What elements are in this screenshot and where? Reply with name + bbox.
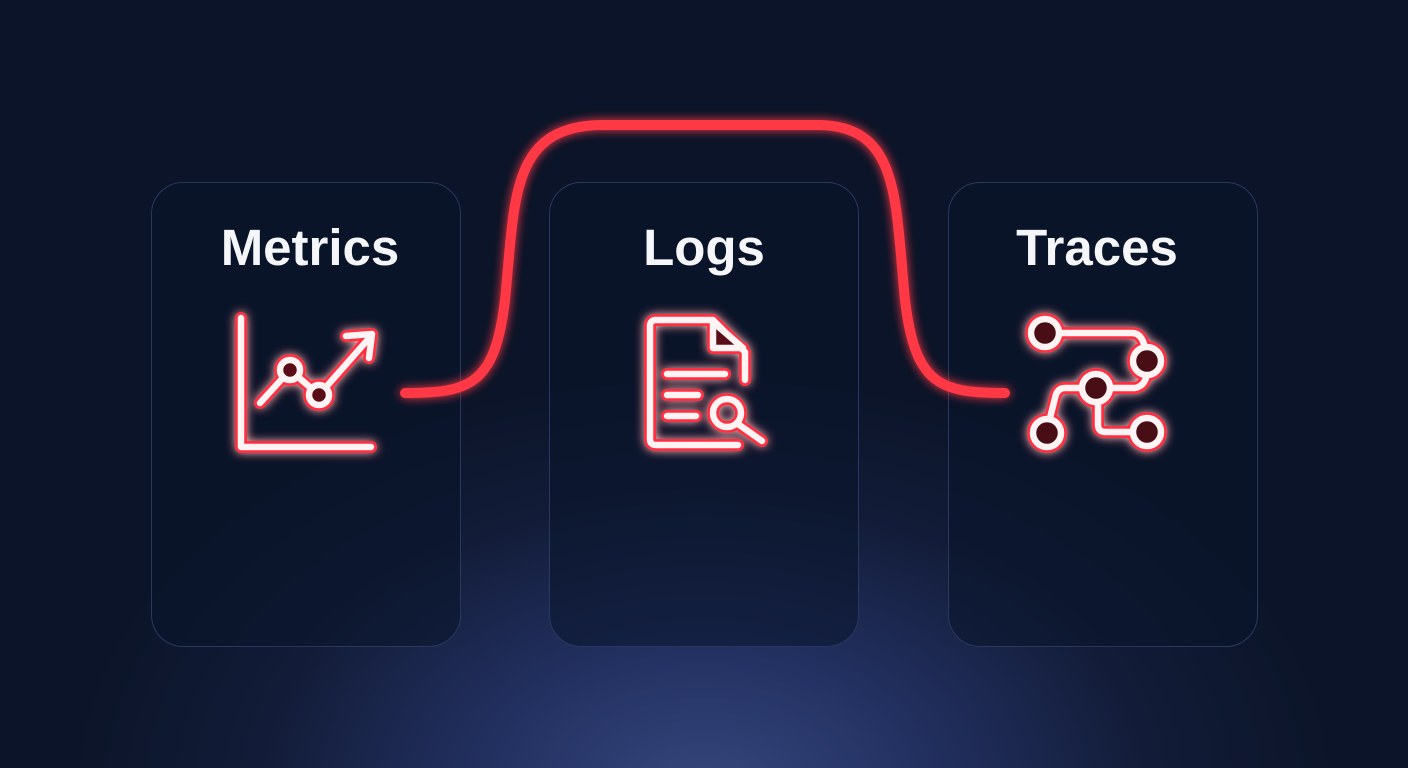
icon: logs document xyxy=(650,320,762,445)
connector curve xyxy=(405,125,1005,393)
heading: Metrics: Metrics xyxy=(221,219,399,276)
card: logs xyxy=(549,182,859,647)
icon: traces graph xyxy=(1031,319,1161,447)
card: metrics xyxy=(151,182,461,647)
icon: metrics chart xyxy=(241,318,372,447)
heading: Logs: Logs xyxy=(643,219,765,276)
card: traces xyxy=(948,182,1258,647)
heading: Traces: Traces xyxy=(1016,219,1178,276)
